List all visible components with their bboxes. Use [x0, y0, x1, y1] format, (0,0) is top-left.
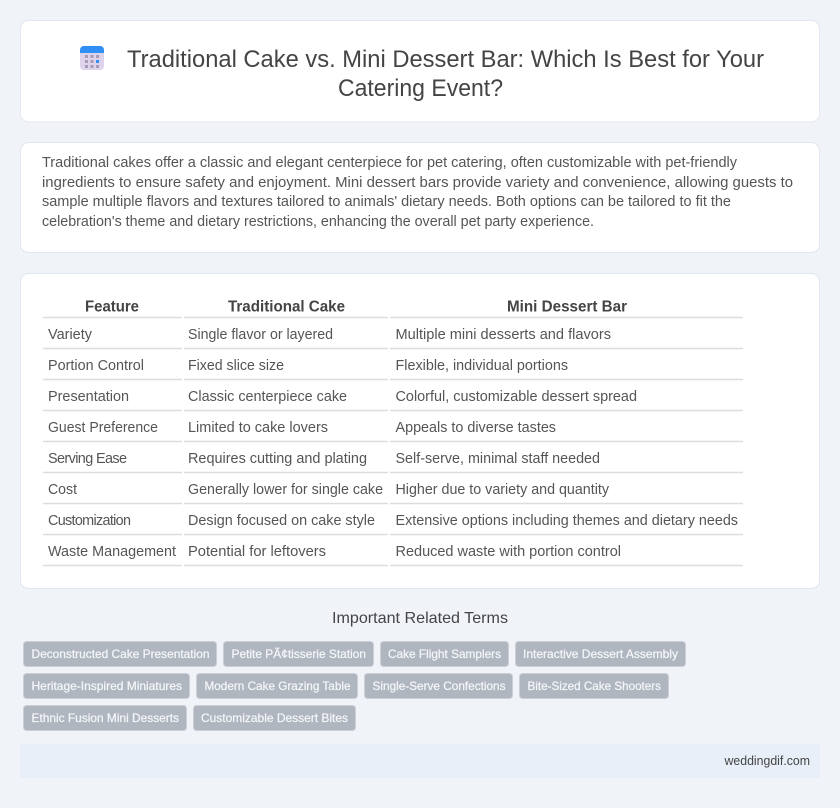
tag: [224, 642, 374, 666]
table row: Guest Preference: Appeals to diverse tastes: [396, 420, 556, 436]
icon: calendar: [80, 46, 104, 70]
table row: Guest Preference: Guest Preference: [48, 420, 158, 436]
tag: Interactive Dessert Assembly: [523, 647, 678, 661]
title: Catering Event?: [338, 75, 503, 102]
tag: [24, 674, 190, 698]
tag: Modern Cake Grazing Table: [204, 679, 351, 693]
tag: [194, 706, 356, 730]
table header: Feature: [85, 298, 139, 316]
table row: Serving Ease: Requires cutting and plating: [188, 451, 367, 467]
table row: Waste Management: Potential for leftovers: [188, 544, 326, 560]
table row: Serving Ease: [48, 451, 600, 467]
panel: introduction text: Traditional cakes offer a classic and elegant centerpiece for pet catering, often customizable with pet-friendly: [42, 155, 738, 171]
tag: [196, 674, 358, 698]
tag: Ethnic Fusion Mini Desserts: [32, 711, 179, 725]
table row: Waste Management: Waste Management: [48, 544, 176, 560]
table row: Portion Control: Flexible, individual portions: [396, 358, 568, 374]
tag: [380, 642, 508, 666]
table row: Presentation: Presentation: [48, 389, 129, 405]
tag: [24, 642, 216, 666]
table row: Waste Management: [48, 544, 621, 560]
panel: introduction text: ingredients to ensure safety and enjoyment. Mini dessert bars provide variety and convenience, allowing guests to: [42, 175, 793, 191]
table row: Variety: Single flavor or layered: [188, 327, 333, 343]
title: Traditional Cake vs. Mini Dessert Bar: Which Is Best for Your: [127, 46, 764, 73]
table row: Presentation: Classic centerpiece cake: [188, 389, 347, 405]
table row: Portion Control: Portion Control: [48, 358, 144, 374]
panel: header: [20, 20, 820, 122]
heading: Important Related Terms: Important Related Terms: [332, 610, 508, 627]
table row: Presentation: [48, 389, 637, 405]
table row: Customization: Design focused on cake style: [188, 513, 375, 529]
panel: introduction text: sample multiple flavors and textures tailored to animals' dietary needs. Both options can be tailored to fit the: [42, 194, 731, 210]
table row: Guest Preference: Limited to cake lovers: [188, 420, 328, 436]
table row: Cost: Higher due to variety and quantity: [396, 482, 610, 498]
tag: Cake Flight Samplers: [388, 647, 501, 661]
table row: Portion Control: [48, 358, 568, 374]
table header: Traditional Cake: [228, 298, 345, 316]
tag: Petite PÃ¢tisserie Station: [232, 647, 366, 661]
tag: Heritage-Inspired Miniatures: [32, 679, 182, 693]
table row: Variety: [48, 327, 611, 343]
table header: Mini Dessert Bar: [507, 298, 627, 316]
tag: [516, 642, 686, 666]
table row: Serving Ease: Self-serve, minimal staff needed: [396, 451, 600, 467]
title: [127, 46, 764, 102]
table row: Customization: Extensive options including themes and dietary needs: [396, 513, 738, 529]
tag: Deconstructed Cake Presentation: [32, 647, 210, 661]
footer: weddingdif.com: [724, 754, 810, 768]
table row: Variety: Variety: [48, 327, 93, 343]
table rules: [43, 318, 743, 566]
panel: related term tags: [24, 642, 686, 730]
table row: Guest Preference: [48, 420, 556, 436]
tag: [364, 674, 512, 698]
tag: Bite-Sized Cake Shooters: [528, 679, 661, 693]
table row: Serving Ease: Serving Ease: [48, 451, 127, 467]
table row: Cost: Generally lower for single cake: [188, 482, 383, 498]
tag: [520, 674, 668, 698]
table row: Portion Control: Fixed slice size: [188, 358, 284, 374]
tag: Single-Serve Confections: [372, 679, 506, 693]
table row: Presentation: Colorful, customizable dessert spread: [396, 389, 637, 405]
footer: [20, 744, 820, 778]
panel: introduction text: [20, 142, 820, 252]
table row: Customization: [48, 513, 738, 529]
tag: Customizable Dessert Bites: [201, 711, 348, 725]
table row: Cost: [48, 482, 610, 498]
panel: comparison table: [20, 274, 820, 588]
table row: Waste Management: Reduced waste with portion control: [396, 544, 621, 560]
table row: Cost: Cost: [48, 482, 77, 498]
table header: [85, 298, 627, 316]
tag: [24, 706, 186, 730]
panel: introduction text: celebration's theme and dietary restrictions, enhancing the overall pet party experience.: [42, 214, 594, 230]
table row: Variety: Multiple mini desserts and flavors: [396, 327, 611, 343]
table row: Customization: Customization: [48, 513, 131, 529]
